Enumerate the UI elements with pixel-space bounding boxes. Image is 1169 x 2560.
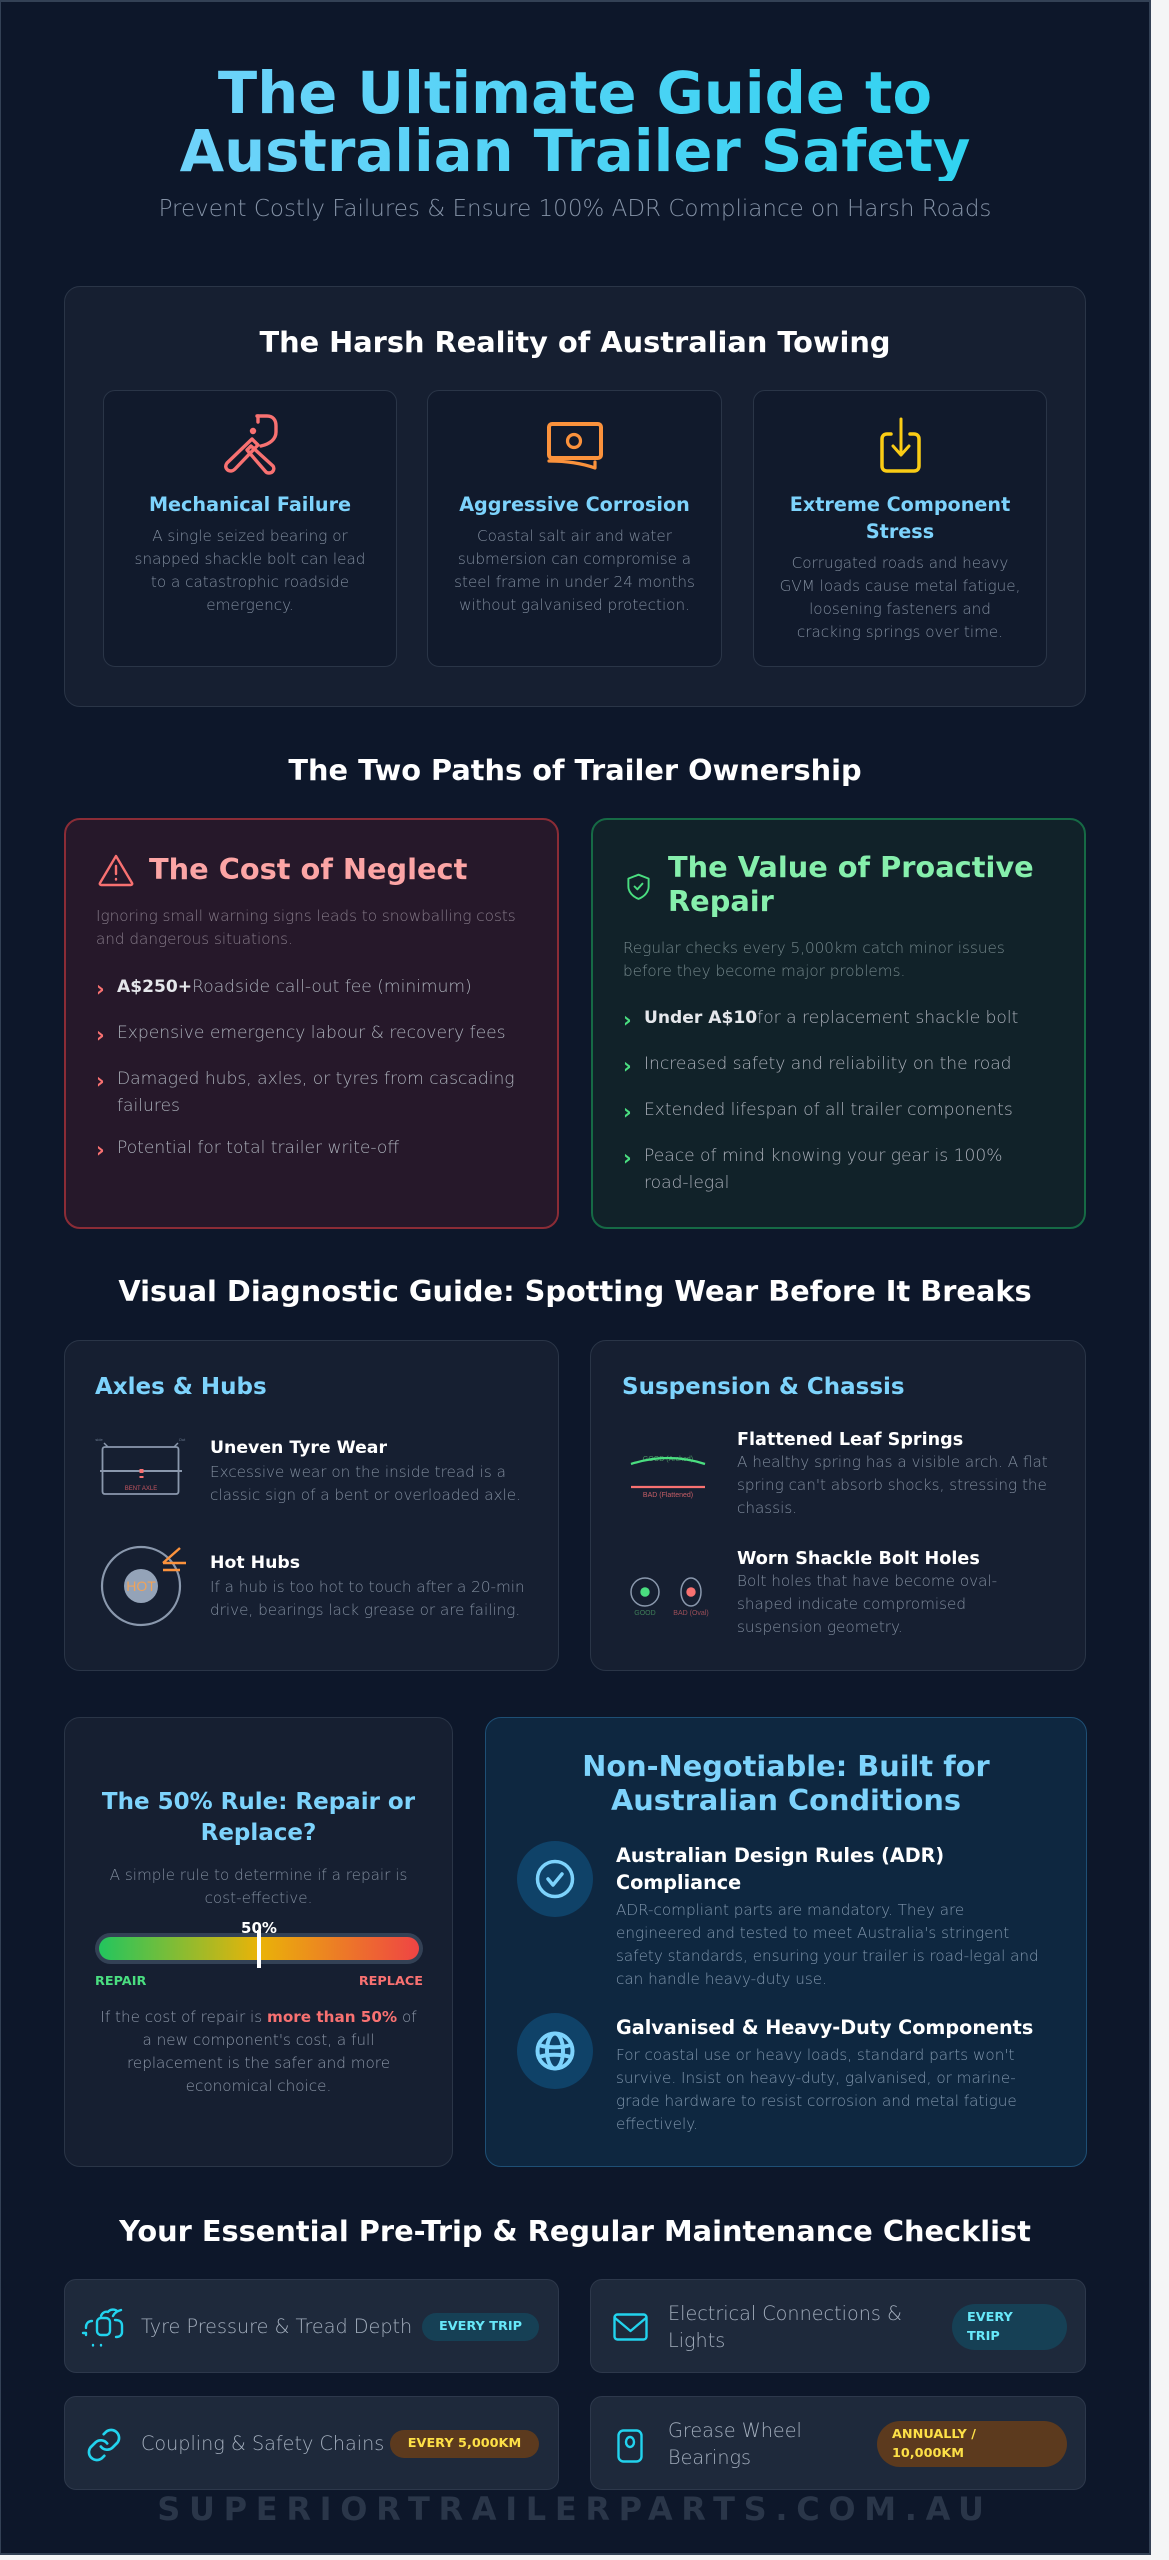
icon: leaf spring diagram: GOOD (Arched) <box>643 1456 693 1463</box>
description: chassis. <box>737 1499 797 1517</box>
watermark: SUPERIORTRAILERPARTS.COM.AU <box>157 2490 993 2528</box>
icon: envelope <box>613 2313 648 2341</box>
badge: TRIP <box>967 2329 1000 2344</box>
item: Potential for total trailer write-off <box>117 1138 399 1158</box>
label: Australian Design Rules (ADR) <box>616 1844 944 1867</box>
label: repair: REPAIR <box>95 1974 146 1989</box>
description: cracking springs over time. <box>797 623 1003 641</box>
heading: Non-Negotiable: Built for <box>582 1749 990 1783</box>
explanation: If the cost of repair is more than 50% of <box>100 2008 417 2026</box>
list <box>623 1008 1018 1193</box>
icon: bent axle diagram: BENT AXLE <box>125 1486 157 1492</box>
label: Lights <box>668 2329 725 2352</box>
text: flattened leaf springs <box>737 1430 1048 1517</box>
description: and dangerous situations. <box>96 930 293 948</box>
item: Expensive emergency labour & recovery fees <box>117 1023 506 1043</box>
heading: The 50% Rule: Repair or <box>102 1789 415 1815</box>
icon: tyre <box>83 2306 125 2350</box>
chevron: › <box>96 1023 105 1047</box>
chevron: › <box>623 1100 632 1124</box>
marker <box>257 1930 261 1968</box>
gauge gradient <box>99 1937 419 1960</box>
label: Compliance <box>616 1871 741 1894</box>
description <box>623 939 1005 980</box>
icon: warning triangle <box>98 854 134 886</box>
heading: two paths: The Two Paths of Trailer Ownership <box>288 753 862 787</box>
panel: 50 percent rule <box>64 1717 453 2167</box>
description: Ignoring small warning signs leads to snowballing costs <box>96 907 516 925</box>
icon: bent axle diagram: side <box>95 1437 103 1442</box>
heading: The Value of Proactive <box>668 850 1034 884</box>
icon: hot hub diagram: HOT <box>126 1578 156 1594</box>
badge: EVERY TRIP <box>439 2319 522 2334</box>
description <box>96 907 516 948</box>
heading <box>582 1749 990 1817</box>
icon: shackle bolt holes diagram: GOOD <box>634 1610 656 1617</box>
label: Grease Wheel <box>668 2419 802 2442</box>
description: drive, bearings lack grease or are failing. <box>210 1601 520 1619</box>
item: Increased safety and reliability on the road <box>644 1054 1012 1074</box>
heading <box>102 1789 416 1846</box>
heading: axles and hubs: Axles & Hubs <box>95 1374 267 1400</box>
label <box>668 2417 802 2471</box>
description <box>110 1866 407 1907</box>
item <box>117 1069 515 1116</box>
description: before they become major problems. <box>623 962 905 980</box>
badge <box>877 2421 1067 2467</box>
icon: bent axle diagram <box>95 1437 186 1495</box>
label: Mechanical Failure <box>149 493 351 516</box>
description: classic sign of a bent or overloaded axle. <box>210 1486 521 1504</box>
explanation: replacement is the safer and more <box>127 2054 390 2072</box>
globe glyph <box>536 2032 574 2070</box>
item <box>644 1146 1002 1193</box>
description: Corrugated roads and heavy <box>792 554 1008 572</box>
description: effectively. <box>616 2115 698 2133</box>
heading: suspension and chassis: Suspension & Chassis <box>622 1374 905 1400</box>
icon: banknote <box>547 422 603 470</box>
badge: ANNUALLY / <box>892 2426 976 2442</box>
title: The Ultimate Guide to <box>218 60 932 127</box>
description: GVM loads cause metal fatigue, <box>780 577 1020 595</box>
heading: harsh reality: The Harsh Reality of Australian Towing <box>259 325 891 359</box>
item: Extended lifespan of all trailer components <box>644 1100 1013 1120</box>
panel: suspension and chassis <box>590 1340 1086 1671</box>
description: snapped shackle bolt can lead <box>135 550 365 568</box>
label <box>616 1844 944 1894</box>
icon: shackle bolt holes diagram <box>630 1577 709 1617</box>
heading <box>668 850 1034 918</box>
percent label: 50% <box>241 1919 277 1937</box>
description: cost-effective. <box>205 1889 312 1907</box>
description <box>135 527 365 614</box>
checklist item: coupling <box>64 2396 559 2490</box>
badge: EVERY <box>967 2310 1013 2324</box>
explanation: economical choice. <box>186 2077 331 2095</box>
chevron: › <box>623 1054 632 1078</box>
label: Uneven Tyre Wear <box>210 1438 387 1458</box>
checklist item: electrical connections <box>590 2279 1086 2373</box>
description: loosening fasteners and <box>809 600 991 618</box>
description <box>210 1463 521 1504</box>
chevron: › <box>96 977 105 1001</box>
description: Coastal salt air and water <box>477 527 672 545</box>
text: worn shackle bolt holes <box>737 1549 997 1636</box>
label: Bearings <box>668 2446 751 2469</box>
description: Excessive wear on the inside tread is a <box>210 1463 506 1481</box>
description: submersion can compromise a <box>458 550 691 568</box>
heading: Australian Conditions <box>611 1783 961 1817</box>
description: ADR-compliant parts are mandatory. They are <box>616 1901 964 1919</box>
icon: leaf spring diagram <box>630 1456 706 1499</box>
description: can handle heavy-duty use. <box>616 1970 827 1988</box>
text: uneven tyre wear <box>210 1438 521 1504</box>
card: mechanical failure <box>103 390 397 667</box>
description <box>737 1572 997 1636</box>
explanation: a new component's cost, a full <box>143 2031 374 2049</box>
card: extreme component stress <box>753 390 1047 667</box>
description <box>616 2044 1017 2136</box>
panel: value of proactive repair <box>591 818 1086 1229</box>
description: grade hardware to resist corrosion and metal fatigue <box>616 2092 1017 2110</box>
explanation <box>100 2008 417 2095</box>
label: replace: REPLACE <box>359 1974 423 1989</box>
item: A$250+Roadside call-out fee (minimum) <box>117 977 472 997</box>
label: Tyre Pressure & Tread Depth <box>141 2315 412 2338</box>
icon: bent axle diagram: Out <box>179 1437 186 1442</box>
description <box>780 554 1020 641</box>
label: Extreme Component <box>790 493 1010 516</box>
heading: The Cost of Neglect <box>149 852 467 886</box>
text: hot hubs <box>210 1553 525 1619</box>
label <box>668 2300 902 2354</box>
text: ADR compliance <box>616 1844 1039 1988</box>
badge <box>422 2313 539 2341</box>
description: emergency. <box>206 596 294 614</box>
description: spring can't absorb shocks, stressing the <box>737 1476 1047 1494</box>
badge: 10,000KM <box>892 2446 964 2461</box>
chevron: › <box>96 1138 105 1162</box>
description: shaped indicate compromised <box>737 1595 966 1613</box>
icon: bearing <box>617 2429 644 2463</box>
description: steel frame in under 24 months <box>454 573 695 591</box>
chevron: › <box>623 1146 632 1170</box>
label: Worn Shackle Bolt Holes <box>737 1549 980 1569</box>
description <box>454 527 695 614</box>
icon: chain link <box>85 2426 123 2464</box>
badge <box>390 2430 539 2458</box>
panel: cost of neglect <box>64 818 559 1229</box>
panel: non-negotiable <box>485 1717 1087 2167</box>
gauge track <box>95 1933 423 1964</box>
label: Hot Hubs <box>210 1553 300 1573</box>
icon: check circle <box>517 1841 593 1917</box>
panel: harsh reality <box>64 286 1086 707</box>
description: suspension geometry. <box>737 1618 903 1636</box>
badge <box>952 2304 1067 2350</box>
item: failures <box>117 1096 180 1116</box>
heading: Repair <box>668 884 774 918</box>
checklist item: tyre pressure <box>64 2279 559 2373</box>
item: Damaged hubs, axles, or tyres from cascading <box>117 1069 515 1089</box>
title: Australian Trailer Safety <box>180 118 970 185</box>
label: Stress <box>866 520 934 543</box>
item: Under A$10for a replacement shackle bolt <box>644 1008 1018 1028</box>
description <box>737 1453 1048 1517</box>
icon: arrow into box <box>880 418 921 473</box>
icon: broken tools <box>224 414 278 475</box>
description: Bolt holes that have become oval- <box>737 1572 997 1590</box>
card: aggressive corrosion <box>427 390 722 667</box>
subtitle: Prevent Costly Failures & Ensure 100% ADR Compliance on Harsh Roads <box>159 196 991 222</box>
description: For coastal use or heavy loads, standard parts won't <box>616 2046 1014 2064</box>
description: A single seized bearing or <box>152 527 348 545</box>
label: Flattened Leaf Springs <box>737 1430 963 1450</box>
heading: visual diagnostic guide: Visual Diagnostic Guide: Spotting Wear Before It Breaks <box>118 1274 1032 1308</box>
description: without galvanised protection. <box>459 596 690 614</box>
description <box>616 1901 1039 1988</box>
description: safety standards, ensuring your trailer is road-legal and <box>616 1947 1039 1965</box>
icon: globe <box>517 2013 593 2089</box>
description: A simple rule to determine if a repair is <box>110 1866 407 1884</box>
item: road-legal <box>644 1173 729 1193</box>
title <box>0 65 1150 181</box>
panel: axles and hubs <box>64 1340 559 1671</box>
label: Aggressive Corrosion <box>459 493 690 516</box>
label <box>790 493 1010 543</box>
heading: Replace? <box>201 1820 316 1846</box>
checklist item: grease wheel bearings <box>590 2396 1086 2490</box>
list <box>96 977 515 1162</box>
item: Peace of mind knowing your gear is 100% <box>644 1146 1002 1166</box>
badge: EVERY 5,000KM <box>408 2436 521 2451</box>
icon: shackle bolt holes diagram: BAD (Oval) <box>673 1610 709 1617</box>
description: If a hub is too hot to touch after a 20-min <box>210 1578 525 1596</box>
description: engineered and tested to meet Australia's stringent <box>616 1924 1009 1942</box>
icon: leaf spring diagram: BAD (Flattened) <box>643 1492 693 1499</box>
label: Galvanised & Heavy-Duty Components <box>616 2016 1033 2039</box>
description: to a catastrophic roadside <box>151 573 349 591</box>
label: Electrical Connections & <box>668 2302 902 2325</box>
icon: shield check <box>627 874 650 900</box>
chevron: › <box>623 1008 632 1032</box>
description: A healthy spring has a visible arch. A flat <box>737 1453 1048 1471</box>
label: Coupling & Safety Chains <box>141 2432 384 2455</box>
check glyph <box>536 1860 574 1898</box>
text: galvanised components <box>616 2014 1076 2139</box>
description <box>210 1578 525 1619</box>
heading: checklist: Your Essential Pre-Trip & Regular Maintenance Checklist <box>119 2214 1031 2248</box>
description: survive. Insist on heavy-duty, galvanised, or marine- <box>616 2069 1016 2087</box>
gauge: repair vs replace <box>95 1919 423 1989</box>
chevron: › <box>96 1069 105 1093</box>
icon: hot hub diagram <box>100 1546 186 1626</box>
description: Regular checks every 5,000km catch minor issues <box>623 939 1005 957</box>
